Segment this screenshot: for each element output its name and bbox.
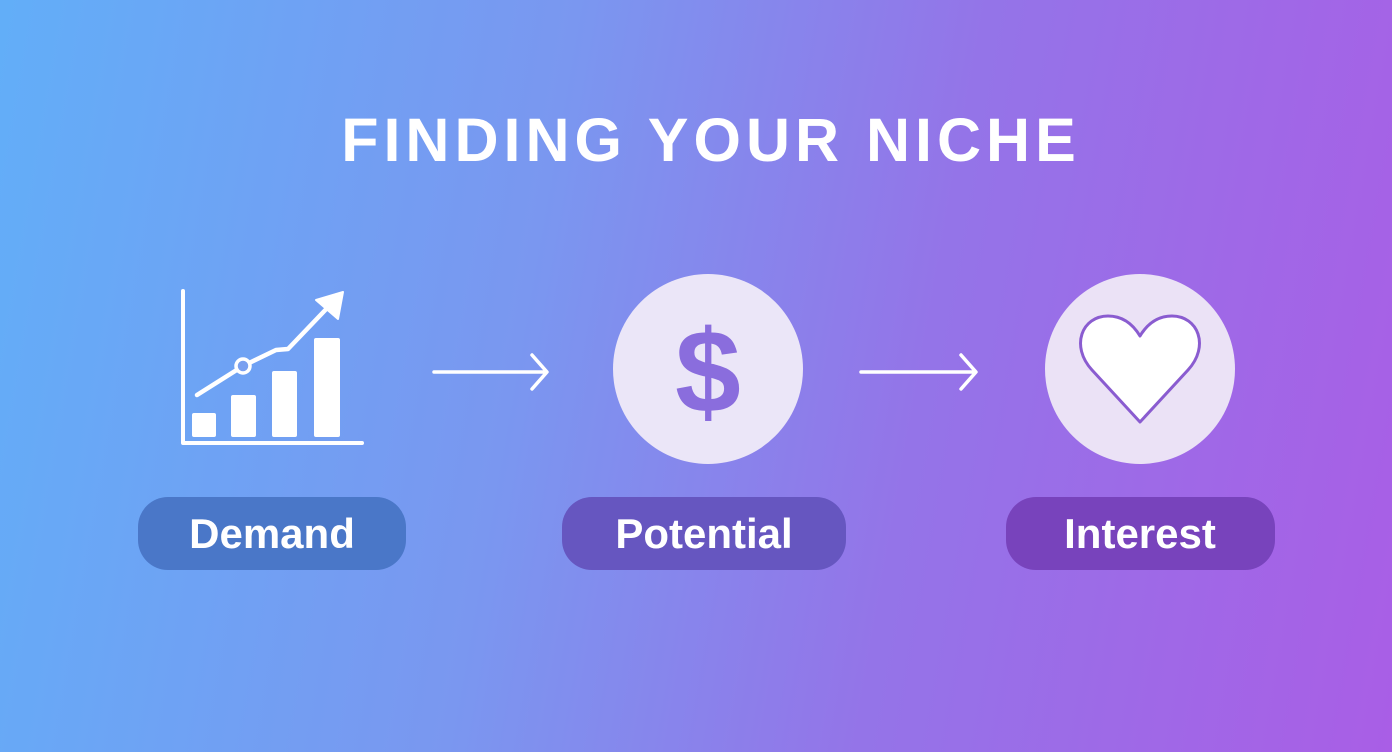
pill: Interest: Interest [1064, 510, 1216, 557]
icon: heart circle [1045, 274, 1235, 464]
pill: Potential: Potential [615, 510, 793, 557]
icon: bar chart [183, 291, 362, 443]
pill: Demand: Demand [189, 510, 355, 557]
pill: Demand [138, 497, 406, 570]
arrow 2 [861, 355, 976, 389]
icon: dollar circle [613, 274, 803, 464]
pill: Interest [1006, 497, 1275, 570]
arrow 1 [434, 355, 547, 389]
pill: Potential [562, 497, 846, 570]
icon: dollar circle: $ [675, 306, 741, 438]
title: FINDING YOUR NICHE [341, 106, 1081, 174]
